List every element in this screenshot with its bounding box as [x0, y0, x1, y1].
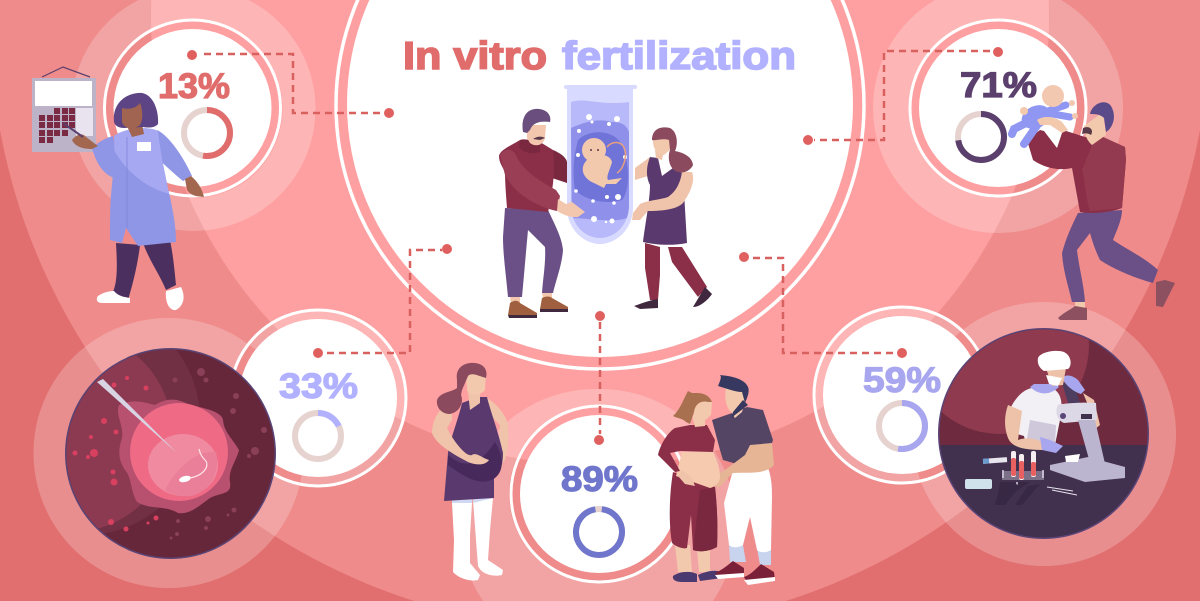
panel: 71 percent — [910, 20, 1086, 196]
panel: 89 percent — [511, 406, 687, 582]
central circle — [336, 0, 864, 369]
figure: father lifting baby — [1012, 85, 1175, 320]
disc: lab scientist at microscope — [938, 328, 1149, 539]
panel: 13 percent — [104, 20, 280, 196]
figure: mother in the centre — [632, 127, 712, 309]
disc: egg and sperm micrograph — [65, 348, 276, 559]
connector dots — [187, 47, 1003, 445]
connector lines — [204, 51, 990, 434]
panel: 71 percent: 71% — [960, 66, 1037, 105]
icon: test tube with embryo — [564, 85, 637, 244]
panel: 33 percent: 33% — [279, 367, 358, 406]
figure: expecting couple — [658, 375, 775, 585]
panel: 59 percent: 59% — [863, 361, 941, 400]
figure: pregnant woman — [432, 363, 508, 581]
figure: doctor — [63, 93, 204, 310]
title: fertilization — [562, 35, 796, 78]
panel: 59 percent — [814, 307, 990, 483]
figure: father in the centre — [499, 109, 585, 318]
title: In vitro — [403, 35, 547, 78]
title — [403, 35, 796, 78]
panel: 33 percent — [230, 310, 406, 486]
panel: 89 percent: 89% — [561, 460, 638, 499]
panel: 13 percent: 13% — [158, 67, 230, 106]
icon: wall calendar — [32, 67, 96, 152]
